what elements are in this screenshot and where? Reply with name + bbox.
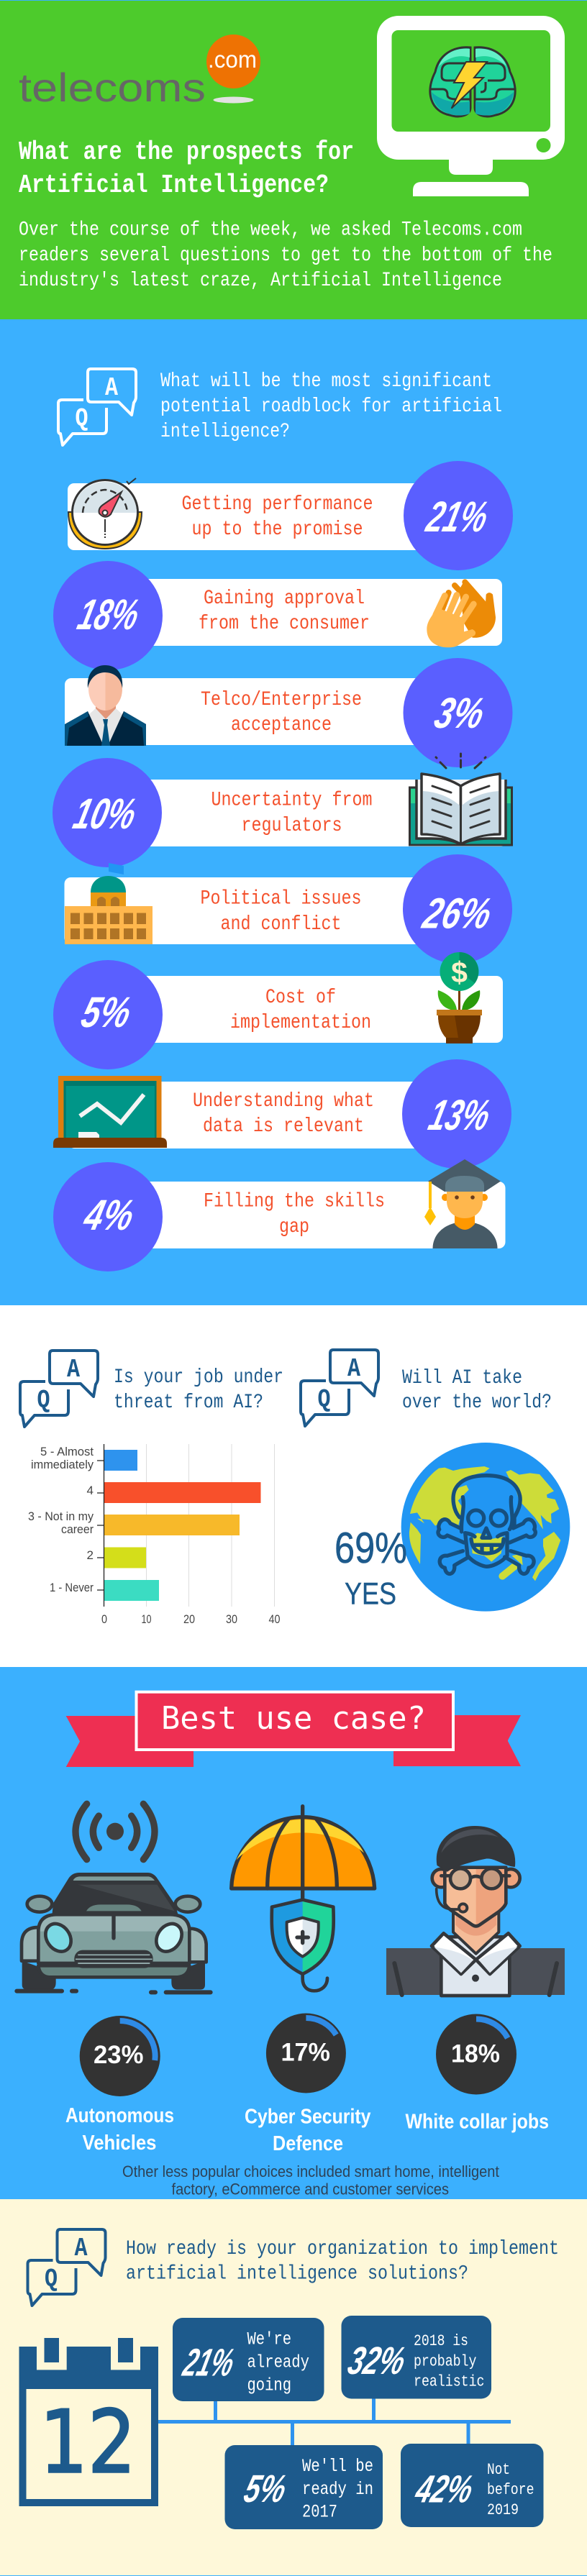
y axis labels: immediately xyxy=(31,1458,94,1471)
label: Cyber Security xyxy=(245,2106,371,2129)
note: other choices: factory, eCommerce and customer services xyxy=(171,2180,449,2198)
row: political 26% xyxy=(65,854,512,964)
question: readiness xyxy=(126,2238,559,2285)
icon: question and answer bubbles: Q xyxy=(75,404,88,434)
timeline line xyxy=(158,2398,511,2445)
stat: 69% yes: 69% xyxy=(335,1524,407,1572)
question: world takeover xyxy=(402,1367,552,1414)
y axis labels: 1 - Never xyxy=(50,1581,94,1594)
box: not before 2019 42% xyxy=(401,2444,544,2527)
icon: graduate xyxy=(424,1159,501,1248)
value: 5% xyxy=(77,988,137,1036)
x axis labels xyxy=(101,1612,281,1626)
icon: clapping hands xyxy=(427,581,496,647)
icon: question and answer bubbles xyxy=(20,1351,98,1427)
note: other choices xyxy=(122,2162,499,2198)
logo: telecoms.com: .com xyxy=(208,46,257,73)
y axis labels: 3 - Not in my xyxy=(28,1509,94,1523)
label: White collar jobs xyxy=(406,2110,549,2133)
icon: white collar worker xyxy=(386,1827,565,1996)
box: 2018 realistic 32%: probably xyxy=(414,2353,476,2370)
box: ready in 2017 5%: 2017 xyxy=(302,2501,337,2523)
value: 13% xyxy=(424,1091,496,1139)
label: Vehicles xyxy=(82,2132,157,2155)
label xyxy=(65,2104,174,2155)
panel: job threat and world takeover xyxy=(20,1350,570,1626)
label: Gaining approval xyxy=(204,588,365,610)
icon: question and answer bubbles: A xyxy=(347,1354,360,1384)
value: 3% xyxy=(430,689,490,737)
icon: connected car xyxy=(17,1804,211,1992)
title: Artificial Intelligence? xyxy=(19,170,329,200)
logo: telecoms.com xyxy=(19,35,260,110)
box: already going 21% xyxy=(173,2318,324,2401)
icon: question and answer bubbles: Q xyxy=(318,1385,331,1415)
stat: cyber security defence 17%: 17% xyxy=(281,2038,330,2067)
stat: autonomous vehicles 23% xyxy=(65,2016,174,2155)
panel: best use case xyxy=(0,1667,587,2199)
label xyxy=(245,2106,371,2155)
label line two: up to the promise xyxy=(191,519,363,541)
question heading: potential roadblock for artificial xyxy=(160,396,502,418)
box: 2018 realistic 32%: realistic xyxy=(414,2373,485,2390)
icon: question and answer bubbles: Q xyxy=(37,1386,50,1415)
box: not before 2019 42%: 2019 xyxy=(487,2501,519,2519)
box: already going 21%: 21% xyxy=(178,2340,239,2384)
icon: globe with skull and crossbones xyxy=(401,1443,570,1612)
y axis labels: career xyxy=(61,1522,94,1536)
x axis labels: 30 xyxy=(226,1612,237,1626)
icon: businessman xyxy=(65,665,146,746)
label: Political issues xyxy=(200,887,361,910)
question: job threat: Is your job under xyxy=(114,1366,283,1389)
box: ready in 2017 5%: We'll be xyxy=(302,2456,373,2477)
x axis labels: 40 xyxy=(269,1612,281,1626)
row: skills 4% xyxy=(53,1159,505,1271)
panel: roadblocks xyxy=(0,319,587,1305)
box: 2018 realistic 32%: 2018 is xyxy=(414,2332,468,2350)
y axis labels: 5 - Almost xyxy=(40,1445,94,1458)
label line two: gap xyxy=(279,1216,309,1238)
icon: brain with lightning bolt xyxy=(430,47,515,117)
box: ready in 2017 5%: ready in xyxy=(302,2479,373,2500)
logo: telecoms.com: telecoms xyxy=(19,65,206,110)
bar chart xyxy=(28,1444,281,1626)
box: not before 2019 42%: 42% xyxy=(411,2467,478,2511)
stat: 69% yes: YES xyxy=(345,1576,396,1611)
intro text xyxy=(19,219,552,292)
question heading: What will be the most significant xyxy=(160,370,492,393)
value: 10% xyxy=(69,790,142,838)
box: ready in 2017 5%: 5% xyxy=(240,2467,291,2511)
title xyxy=(19,137,354,200)
panel: header xyxy=(0,0,587,319)
question: job threat: threat from AI? xyxy=(114,1392,263,1414)
icon: question and answer bubbles xyxy=(301,1350,378,1426)
row: cost 5% xyxy=(53,952,503,1069)
label line two: regulators xyxy=(242,815,342,837)
label: Getting performance xyxy=(181,493,373,516)
label line two: from the consumer xyxy=(199,613,370,635)
icon: question and answer bubbles xyxy=(27,2229,105,2306)
question: job threat xyxy=(114,1366,283,1414)
value: 4% xyxy=(78,1191,140,1239)
label: Defence xyxy=(273,2132,343,2155)
icon: umbrella over security shield xyxy=(232,1807,375,1991)
question heading xyxy=(160,370,502,443)
box: not before 2019 42%: Not xyxy=(487,2461,510,2479)
stat: white collar jobs 18% xyxy=(406,2014,549,2133)
note: other choices: Other less popular choices included smart home, intelligent xyxy=(122,2162,499,2180)
panel: readiness xyxy=(0,2199,587,2576)
question: world takeover: over the world? xyxy=(402,1392,552,1414)
stat: cyber security defence 17% xyxy=(245,2014,371,2155)
icon: chalkboard with chart xyxy=(53,1076,167,1148)
box: 2018 realistic 32%: 32% xyxy=(344,2339,410,2383)
question: world takeover: Will AI take xyxy=(402,1367,522,1389)
value: 21% xyxy=(422,493,493,541)
icon: question and answer bubbles xyxy=(58,369,136,445)
label: Telco/Enterprise xyxy=(201,689,362,711)
label: Uncertainty from xyxy=(211,790,373,811)
icon: computer monitor xyxy=(377,16,565,196)
icon: calendar xyxy=(19,2338,158,2506)
banner: best use case: Best use case? xyxy=(161,1700,426,1737)
box: 2018 realistic 32% xyxy=(341,2316,491,2399)
question heading: intelligence? xyxy=(160,421,290,443)
title: What are the prospects for xyxy=(19,137,354,167)
value: 18% xyxy=(73,590,145,639)
icon: question and answer bubbles: A xyxy=(67,1355,80,1384)
y axis labels: 2 xyxy=(87,1548,94,1562)
box: not before 2019 42%: before xyxy=(487,2481,534,2499)
label line two: data is relevant xyxy=(203,1115,364,1138)
icon: calendar: 12 xyxy=(40,2393,136,2493)
icon: government building xyxy=(65,863,153,944)
icon: question and answer bubbles: A xyxy=(105,373,118,403)
y axis labels: 4 xyxy=(87,1484,94,1497)
stat: white collar jobs 18%: 18% xyxy=(451,2040,500,2068)
banner: best use case xyxy=(66,1692,521,1767)
stat: autonomous vehicles 23%: 23% xyxy=(94,2041,144,2069)
icon: question and answer bubbles: Q xyxy=(45,2265,58,2294)
icon: money plant xyxy=(437,952,482,1043)
value: 26% xyxy=(418,889,497,937)
row: regulators 10% xyxy=(53,754,512,867)
box: already going 21%: already xyxy=(247,2352,309,2373)
row: performance 21% xyxy=(68,461,513,570)
x axis labels: 20 xyxy=(183,1612,195,1626)
stat: 69% yes xyxy=(335,1524,407,1611)
label: Autonomous xyxy=(65,2104,174,2127)
label: Filling the skills xyxy=(204,1191,385,1212)
y axis labels xyxy=(28,1445,94,1594)
label: Cost of xyxy=(265,987,336,1009)
row: consumer 18% xyxy=(53,561,502,670)
label line two: implementation xyxy=(230,1012,371,1034)
icon: money plant: $ xyxy=(451,956,468,989)
label: Understanding what xyxy=(193,1090,374,1113)
x axis labels: 10 xyxy=(141,1612,151,1626)
icon: open book xyxy=(410,754,512,845)
icon: gauge xyxy=(68,478,142,549)
row: data 13% xyxy=(53,1059,511,1169)
box: already going 21%: going xyxy=(247,2375,291,2396)
box: ready in 2017 5% xyxy=(224,2445,383,2529)
icon: question and answer bubbles: A xyxy=(75,2234,88,2263)
question: readiness: artificial intelligence solutions? xyxy=(126,2262,468,2285)
label line two: and conflict xyxy=(220,913,341,936)
row: telco 3% xyxy=(65,658,512,767)
label line two: acceptance xyxy=(231,714,332,736)
box: already going 21%: We're xyxy=(247,2329,291,2350)
x axis labels: 0 xyxy=(101,1612,107,1626)
intro text: industry's latest craze, Artificial Intelligence xyxy=(19,270,502,292)
